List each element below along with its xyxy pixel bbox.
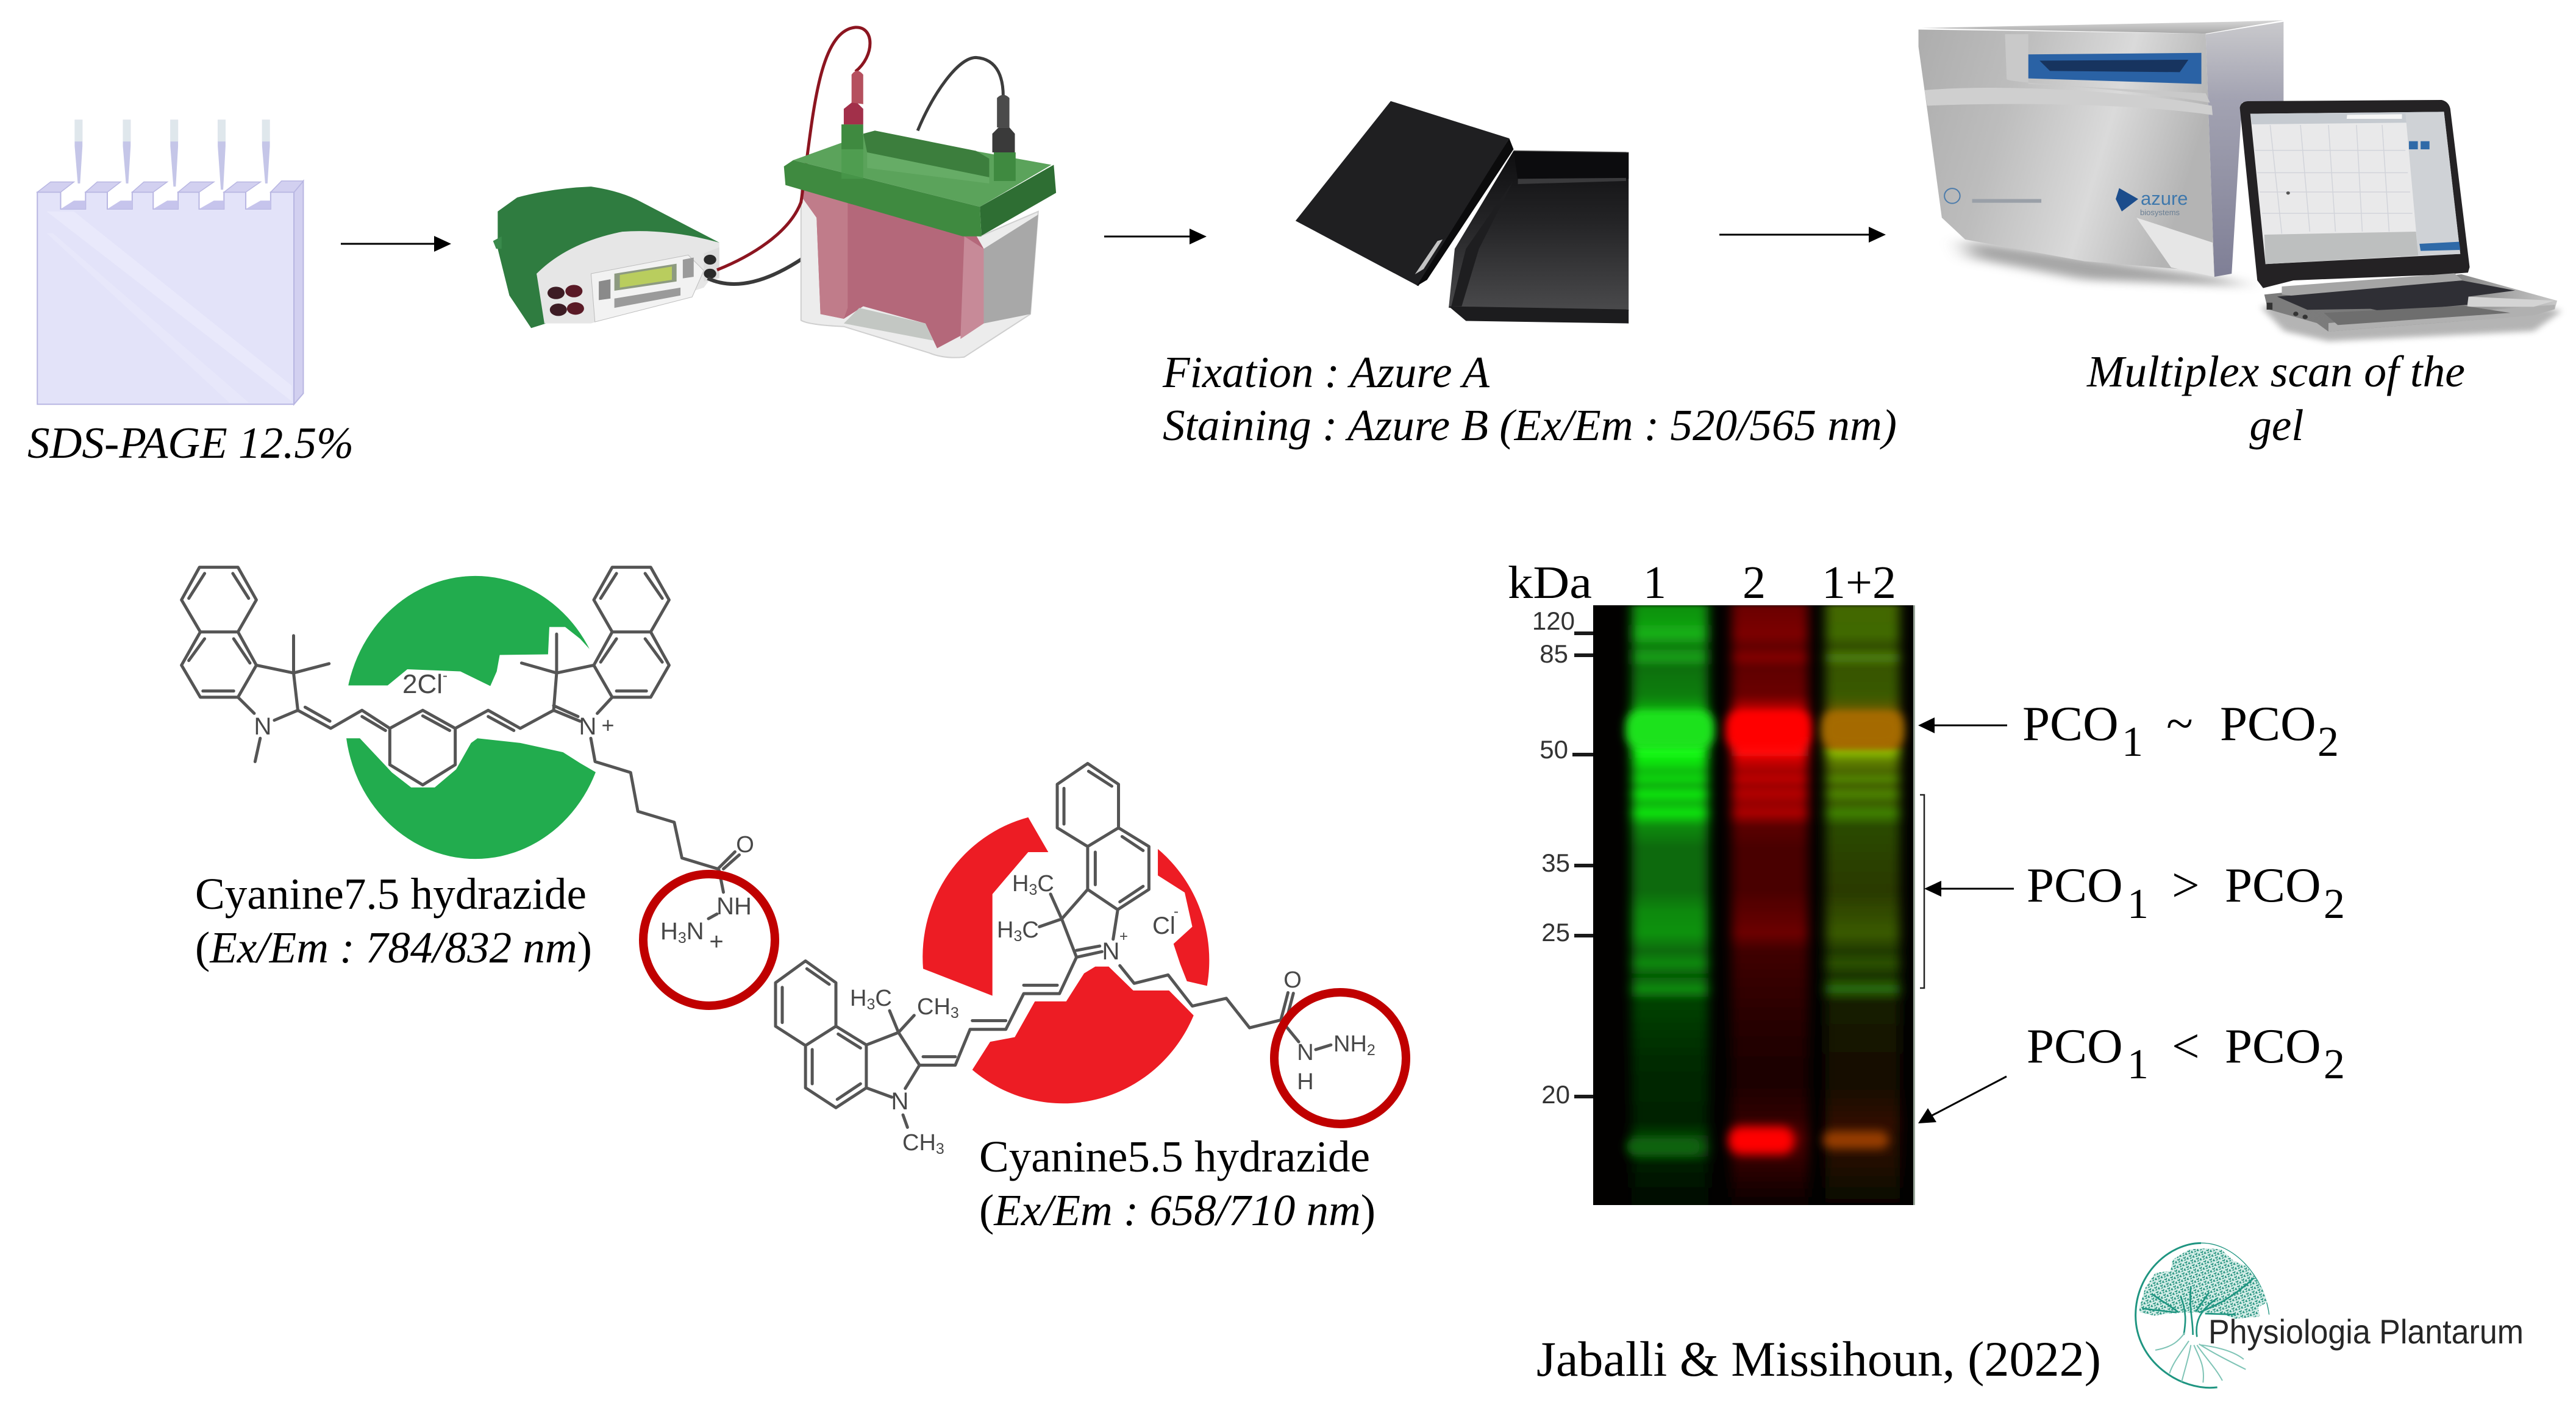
atom labels: H xyxy=(850,986,866,1011)
lane headers: 1+2 xyxy=(1822,557,1896,608)
label: PCO1 > PCO2: PCO xyxy=(2027,858,2123,912)
label: PCO1 < PCO2: 2 xyxy=(2324,1041,2345,1088)
arrow: PCO1 > PCO2 xyxy=(1924,881,2014,897)
panel: Cyanine5.5 hydrazide xyxy=(776,764,1406,1235)
lane 2: PCO2 red xyxy=(1726,605,1810,1205)
atom labels: - xyxy=(443,667,448,684)
pipette tips xyxy=(74,119,270,190)
molecular weight markers: 85 xyxy=(1540,639,1568,668)
atom labels: + xyxy=(709,928,724,955)
panel: SDS-PAGE gel cassette xyxy=(27,119,354,468)
atom labels: N xyxy=(1297,1040,1314,1065)
label: PCO1 ~ PCO2 xyxy=(2022,696,2339,766)
reactive group circle xyxy=(643,874,775,1006)
atom labels: + xyxy=(1119,928,1128,945)
label: PCO1 < PCO2: 1 xyxy=(2127,1041,2149,1088)
atom labels xyxy=(254,667,754,955)
tree roots xyxy=(2155,1333,2246,1382)
label: PCO1 ~ PCO2: ~ xyxy=(2166,696,2193,751)
label: PCO1 > PCO2: PCO xyxy=(2225,858,2321,912)
bracket xyxy=(1920,795,1924,988)
arrow: staining to scanner xyxy=(1719,227,1886,243)
arrow: PCO1 ~ PCO2 xyxy=(1918,717,2007,733)
molecular weight markers: 35 xyxy=(1541,848,1570,877)
black lead to tank xyxy=(708,246,821,284)
caption: multiplex scan: gel xyxy=(2249,400,2304,450)
red dye highlight xyxy=(922,817,1209,1103)
electrode posts xyxy=(841,71,1016,181)
label: PCO1 > PCO2: 1 xyxy=(2127,881,2149,928)
front logos xyxy=(1944,188,2138,212)
green lid xyxy=(784,130,1056,237)
caption: Cyanine5.5: (Ex/Em : 658/710 nm) xyxy=(979,1186,1375,1235)
atom labels: H xyxy=(1297,1069,1314,1095)
atom labels xyxy=(850,871,1375,1158)
atom labels: N xyxy=(687,918,704,945)
atom labels: CH xyxy=(917,994,951,1020)
atom labels: 2Cl xyxy=(402,669,443,699)
panel: Cyanine7.5 hydrazide xyxy=(182,549,775,1006)
atom labels: Cl xyxy=(1152,912,1176,939)
reactive group circle xyxy=(1274,992,1406,1124)
atom labels: NH xyxy=(716,893,752,920)
atom labels: N xyxy=(1102,938,1119,965)
atom labels: O xyxy=(736,832,754,858)
lid xyxy=(1296,101,1513,286)
molecular weight markers: 25 xyxy=(1541,918,1570,947)
arrow: PCO1 < PCO2 xyxy=(1918,1076,2007,1123)
molecular weight markers: 50 xyxy=(1540,735,1568,764)
gel background xyxy=(1593,605,1914,1205)
gel front plate xyxy=(37,192,294,404)
tree canopy xyxy=(2139,1248,2267,1318)
arrow: gel to electrophoresis xyxy=(341,236,451,252)
molecular weight markers: 120 xyxy=(1532,606,1575,635)
molecular weight markers xyxy=(1532,606,1594,1109)
label: PCO1 > PCO2 xyxy=(2027,858,2345,928)
atom labels: C xyxy=(1037,871,1054,897)
caption: Cyanine7.5: (Ex/Em : 784/832 nm) xyxy=(195,923,592,972)
blue loading slot xyxy=(2028,53,2202,84)
caption: Cyanine7.5 xyxy=(195,869,592,972)
tree trunk and branches xyxy=(2174,1312,2205,1345)
molecular weight markers: 20 xyxy=(1541,1080,1570,1109)
lane headers: 1 xyxy=(1643,557,1666,608)
label: PCO1 ~ PCO2: PCO xyxy=(2022,696,2119,751)
atom labels: CH xyxy=(902,1130,936,1156)
atom labels: H xyxy=(997,917,1013,943)
scanner body xyxy=(1919,20,2283,277)
buffer tank xyxy=(801,183,1038,358)
hinge xyxy=(2282,273,2463,296)
lane 3: merged xyxy=(1822,605,1903,1205)
caption: fixation and staining: Fixation : Azure A xyxy=(1162,347,1490,397)
caption: fixation and staining xyxy=(1162,347,1897,450)
arrow: electrophoresis to staining xyxy=(1104,229,1207,244)
caption: Cyanine5.5 xyxy=(979,1132,1375,1235)
label: PCO1 ~ PCO2: 1 xyxy=(2122,719,2143,766)
azure brand text: biosystems xyxy=(2140,208,2180,217)
power supply xyxy=(493,187,719,328)
atom labels: 2 xyxy=(1367,1042,1375,1059)
label: PCO1 < PCO2: PCO xyxy=(2225,1019,2321,1073)
atom labels: 3 xyxy=(951,1005,959,1022)
label: PCO1 > PCO2: > xyxy=(2172,858,2200,912)
atom labels: 3 xyxy=(678,930,687,947)
lane headers: kDa xyxy=(1508,557,1592,608)
red lead xyxy=(717,27,870,270)
atom labels: 3 xyxy=(1029,881,1037,898)
laptop base xyxy=(2264,274,2557,332)
label: PCO1 > PCO2: 2 xyxy=(2324,881,2345,928)
atom labels: N xyxy=(891,1088,908,1115)
laptop lid and bezel xyxy=(2240,100,2470,288)
label: PCO1 < PCO2: < xyxy=(2172,1019,2200,1073)
green dye highlight xyxy=(346,575,596,859)
atom labels: C xyxy=(875,986,892,1011)
atom labels: O xyxy=(1283,967,1302,993)
panel: electrophoresis apparatus xyxy=(493,27,1056,358)
caption: multiplex scan xyxy=(2086,347,2465,450)
logo ring xyxy=(2136,1243,2269,1388)
lane 1: PCO1 green xyxy=(1626,605,1714,1205)
caption: Cyanine5.5: Cyanine5.5 hydrazide xyxy=(979,1132,1370,1181)
logo: Physiologia Plantarum xyxy=(2136,1243,2524,1388)
panel: Azure multiplex scanner xyxy=(1919,20,2562,341)
laptop screen xyxy=(2250,112,2460,264)
lane headers: 2 xyxy=(1743,557,1766,608)
azure brand text: azure xyxy=(2141,188,2188,209)
cyanine 5.5 skeleton xyxy=(776,764,1331,1127)
caption: multiplex scan: Multiplex scan of the xyxy=(2086,347,2465,396)
caption: Cyanine7.5: Cyanine7.5 hydrazide xyxy=(195,869,587,919)
atom labels: + xyxy=(601,713,615,738)
open tray xyxy=(1449,151,1629,324)
label: PCO1 < PCO2: PCO xyxy=(2027,1019,2123,1073)
label: PCO1 ~ PCO2: 2 xyxy=(2317,719,2339,766)
lane headers xyxy=(1508,557,1896,608)
panel: fluorescent gel image xyxy=(1508,557,1915,1205)
cyanine 7.5 skeleton xyxy=(182,567,739,919)
panel: black staining box xyxy=(1296,101,1629,324)
atom labels: 3 xyxy=(936,1140,944,1158)
label: PCO1 ~ PCO2: PCO xyxy=(2220,696,2316,751)
caption: SDS-PAGE: SDS-PAGE 12.5% xyxy=(27,418,354,468)
atom labels: C xyxy=(1022,917,1039,943)
laptop shadow xyxy=(2261,294,2562,341)
atom labels: 3 xyxy=(866,996,875,1013)
logo: Physiologia Plantarum: Physiologia Plantarum xyxy=(2208,1312,2524,1351)
atom labels: N xyxy=(579,713,596,740)
atom labels: N xyxy=(254,713,271,740)
atom labels: H xyxy=(1012,871,1029,897)
scanner shadow xyxy=(1963,240,2249,286)
atom labels: 3 xyxy=(1013,928,1022,945)
label: PCO1 < PCO2 xyxy=(2027,1019,2345,1088)
atom labels: NH xyxy=(1333,1031,1367,1057)
gel side and top edges xyxy=(294,181,303,404)
caption: fixation and staining: Staining : Azure B (Ex/Em : 520/565 nm) xyxy=(1163,400,1897,450)
citation: Jaballi & Missihoun, (2022) xyxy=(1536,1331,2101,1387)
atom labels: - xyxy=(1174,903,1179,920)
atom labels: H xyxy=(660,918,678,945)
